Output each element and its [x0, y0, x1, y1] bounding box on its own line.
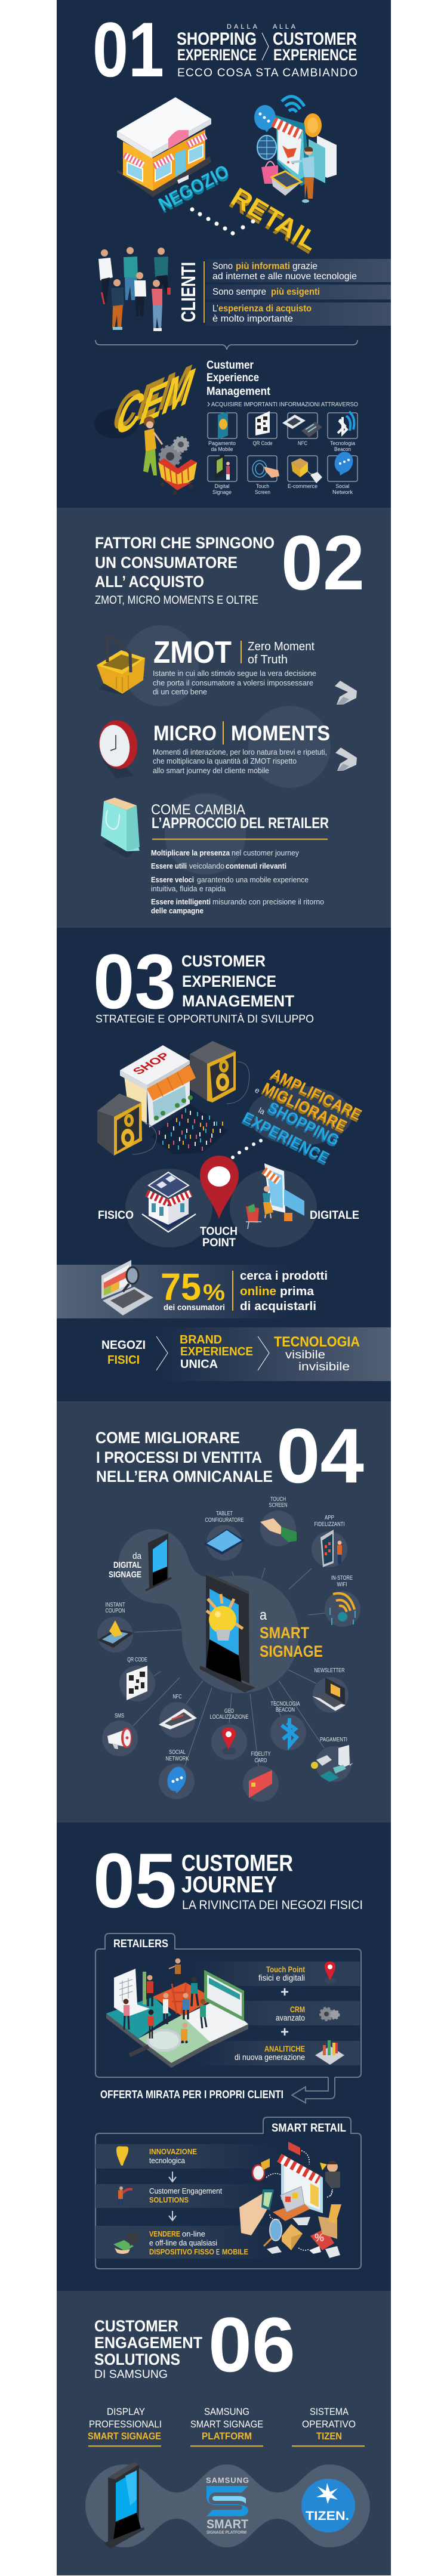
- heading: fattori: FATTORI CHE SPINGONO: [95, 534, 275, 552]
- heading: customer experience management: CUSTOMER: [181, 952, 266, 970]
- logo: tizen: TIZEN.: [306, 2509, 349, 2523]
- blob: three solutions: [85, 2464, 370, 2547]
- illustration: smart retail scene: %: [315, 2232, 324, 2244]
- subheading: LA RIVINCITA DEI NEGOZI FISICI: [182, 1898, 363, 1912]
- node: tecnologia beacon: BEACON: [276, 1707, 295, 1713]
- column: samsung smart signage platform: PLATFORM: [202, 2430, 252, 2442]
- stat: 75%: dei consumatori: [164, 1302, 225, 1312]
- text: cerca i prodotti: prima: [280, 1285, 315, 1298]
- row: più esigenti: [206, 285, 391, 299]
- callout: amplificare e migliorare: SHOPPING: [264, 1100, 341, 1151]
- callout: amplificare e migliorare: [239, 1064, 365, 1169]
- callout: amplificare e migliorare: SHOPPING: [265, 1098, 343, 1149]
- tile: tecnologia beacon: [328, 412, 357, 453]
- text: cerca i prodotti: cerca i prodotti: [240, 1270, 328, 1283]
- box: smart retail frame: [95, 2117, 361, 2269]
- illustration: smart retail scene: [239, 2142, 341, 2258]
- panel: section 05: [57, 1823, 391, 2291]
- plus: +: [280, 2024, 289, 2040]
- heading: customer journey: JOURNEY: [181, 1872, 277, 1898]
- plus: +: [280, 1984, 289, 2000]
- node: nfc: NFC: [173, 1694, 181, 1700]
- row: analitiche: di nuova generazione: [235, 2052, 305, 2062]
- row: più informati: grazie: [292, 261, 317, 271]
- text: tecnologia: [274, 1334, 360, 1373]
- stat: 75%: 75: [161, 1265, 201, 1308]
- arrow down: [169, 2211, 176, 2220]
- label: retail: RETAIL: [224, 186, 321, 260]
- node: geo localizzazione: [210, 1708, 249, 1760]
- heading: customer journey: CUSTOMER: [181, 1851, 293, 1876]
- illustration: shop with speakers and crowd: SHOP: [130, 1051, 173, 1077]
- text: micro moments description: [153, 748, 327, 775]
- logo: tizen: [301, 2479, 355, 2532]
- row: esperienza di acquisto: esperienza di acquisto: [218, 304, 312, 314]
- labels: fisico, touch point, digitale: [98, 1209, 359, 1249]
- heading: shopping to customer experience: EXPERIENCE: [177, 46, 257, 64]
- dotted connector: [231, 1139, 263, 1159]
- node: fidelity card: FIDELITY: [251, 1751, 271, 1758]
- panel: section 03: [57, 928, 391, 1401]
- text: tecnologia: TECNOLOGIA: [274, 1334, 360, 1350]
- column: display professionali: PROFESSIONALI: [89, 2419, 162, 2430]
- tile: social network: Network: [332, 489, 353, 496]
- list: retailer approach: intuitiva, fluida e rapida: [151, 885, 226, 893]
- text: negozi fisici: [101, 1339, 146, 1367]
- label: retail: RETAIL: [226, 183, 323, 257]
- subheading: ECCO COSA STA CAMBIANDO: [177, 67, 357, 79]
- brace: [95, 340, 357, 350]
- node: app fidelizzanti: APP: [325, 1515, 334, 1521]
- divider: clienti: [204, 261, 205, 323]
- label: zmot: [153, 635, 315, 670]
- column: sistema operativo tizen: SISTEMA: [310, 2406, 349, 2417]
- column: samsung smart signage platform: SAMSUNG: [204, 2406, 249, 2417]
- band: negozi fisici to tecnologia: [57, 1327, 391, 1381]
- node: social network: SOCIAL: [169, 1749, 186, 1756]
- tile: tecnologia beacon: Tecnologia: [330, 440, 356, 447]
- heading: fattori: [95, 534, 275, 591]
- heading: processi di vendita: NELL’ERA OMNICANALE: [96, 1468, 273, 1485]
- heading: customer experience management: Experience: [206, 372, 259, 384]
- list: retailer approach: nel customer journey: [232, 849, 300, 857]
- column: display professionali: [88, 2406, 162, 2447]
- list: retailer approach: contenuti rilevanti: [226, 862, 286, 870]
- heading: customer engagement solutions: ENGAGEMENT: [94, 2334, 202, 2352]
- callout: amplificare e migliorare: MIGLIORARE: [260, 1079, 350, 1135]
- icon: map pin: [200, 1156, 239, 1219]
- list: retailer approach: Essere veloci: [151, 876, 194, 884]
- text: brand experience unica: EXPERIENCE: [180, 1345, 253, 1358]
- list: retailer approach: Essere intelligenti: [151, 898, 211, 906]
- tile: tecnologia beacon: Beacon: [334, 446, 351, 453]
- text: brand experience unica: UNICA: [180, 1358, 218, 1371]
- column: display professionali: DISPLAY: [107, 2406, 145, 2417]
- callout: amplificare e migliorare: AMPLIFICARE: [268, 1064, 365, 1124]
- row: vendere: MOBILE: [222, 2247, 248, 2256]
- column: samsung smart signage platform: [190, 2406, 263, 2447]
- text: micro moments description: allo smart journey del cliente mobile: [153, 767, 269, 775]
- text: cerca i prodotti: [240, 1270, 328, 1313]
- node: instant coupon: [97, 1602, 134, 1653]
- row: più informati: Sono: [212, 261, 233, 271]
- logo: samsung smart signage platform: SAMSUNG: [206, 2476, 249, 2485]
- decorative circles: [122, 625, 331, 875]
- label: clienti: CLIENTI: [177, 262, 199, 322]
- stat: 75%: %: [203, 1280, 225, 1305]
- node: touch screen: SCREEN: [269, 1502, 288, 1509]
- stat: 75%: [161, 1265, 225, 1312]
- tile: touch screen: Screen: [255, 489, 270, 496]
- column: samsung smart signage platform: SMART SIGNAGE: [190, 2419, 263, 2430]
- column: sistema operativo tizen: OPERATIVO: [302, 2419, 356, 2430]
- number 04: 04: [276, 1412, 364, 1499]
- node: tablet configuratore: CONFIGURATORE: [205, 1517, 244, 1524]
- heading: shopping to customer experience: CUSTOMER: [273, 29, 357, 49]
- illustration: CEM letters and shopper: CEM: [109, 356, 202, 448]
- blob: digital signage to smart signage: [118, 1529, 299, 1693]
- text: brand experience unica: BRAND: [180, 1333, 222, 1346]
- list: retailer approach: Moltiplicare la presenza: [151, 849, 230, 857]
- touch point circles: [125, 1169, 317, 1247]
- heading: customer experience management: Management: [206, 385, 271, 398]
- subheading: STRATEGIE E OPPORTUNITÀ DI SVILUPPO: [95, 1013, 314, 1025]
- label: da digital signage: [109, 1551, 142, 1580]
- text: cerca i prodotti: di acquistarli: [240, 1300, 316, 1313]
- tile: e-commerce: [288, 456, 322, 490]
- label: a smart signage: a: [260, 1607, 267, 1623]
- heading: customer engagement solutions: SOLUTIONS: [94, 2350, 180, 2368]
- number 05: 05: [93, 1837, 177, 1924]
- number 02: 02: [281, 519, 365, 606]
- panel: section 06: [0, 2291, 447, 2576]
- row: customer engagement solutions: Customer Engagement: [149, 2186, 222, 2195]
- logo: samsung smart signage platform: SMART: [206, 2518, 248, 2531]
- number 03: 03: [93, 938, 176, 1025]
- node: instant coupon: COUPON: [105, 1608, 125, 1614]
- node: newsletter: [312, 1667, 349, 1713]
- heading: come cambia: L’APPROCCIO DEL RETAILER: [152, 815, 329, 832]
- tile: qr code: [248, 411, 277, 447]
- label: da digital signage: SIGNAGE: [109, 1570, 141, 1580]
- tile: digital signage: [208, 453, 237, 496]
- row: touch point: Touch Point: [266, 1965, 305, 1974]
- node: nfc: [159, 1694, 197, 1738]
- row: più informati: ad internet e alle nuove tecnologie: [212, 271, 357, 282]
- tile: digital signage: Signage: [212, 489, 232, 496]
- icon: clock: [96, 718, 140, 779]
- heading: customer engagement solutions: DI SAMSUNG: [94, 2368, 168, 2381]
- node: tecnologia beacon: [270, 1701, 306, 1750]
- number 01: 01: [93, 6, 164, 93]
- label: a smart signage: SIGNAGE: [260, 1642, 323, 1660]
- list: retailer approach: misurando con precisione il ritorno: [212, 898, 324, 906]
- row: innovazione: [95, 2144, 280, 2169]
- icon: shopping bag: [101, 798, 140, 858]
- panel: section 02: [57, 508, 391, 928]
- illustration: store: [117, 97, 211, 197]
- tile: touch screen: Touch: [256, 483, 269, 490]
- row: analitiche: [191, 2040, 360, 2065]
- heading: customer engagement solutions: CUSTOMER: [94, 2317, 178, 2335]
- node: app fidelizzanti: [312, 1515, 347, 1567]
- callout: amplificare e migliorare: EXPERIENCE: [239, 1110, 331, 1169]
- tile: nfc: NFC: [298, 440, 307, 447]
- heading: processi di vendita: I PROCESSI DI VENTITA: [96, 1448, 262, 1466]
- heading: customer journey: [181, 1851, 293, 1898]
- heading: shopping to customer experience: DALLA: [227, 23, 258, 30]
- icon: basket: [97, 637, 145, 695]
- row: touch point: [191, 1962, 360, 1986]
- tile: social network: [328, 449, 357, 496]
- illustration: CEM letters and shopper: [94, 352, 202, 495]
- heading: shopping to customer experience: SHOPPING: [177, 29, 257, 49]
- label: negozio: NEGOZIO: [155, 160, 232, 215]
- tile: touch screen: [248, 456, 279, 496]
- node: tablet configuratore: TABLET: [216, 1511, 233, 1517]
- node: sms: SMS: [115, 1713, 124, 1719]
- labels: fisico, touch point, digitale: TOUCH: [200, 1225, 238, 1238]
- text: zmot description: che porta il consumatore a volersi impossessare: [153, 679, 313, 687]
- panel: section 04: [57, 1401, 391, 1823]
- node: tablet configuratore: [204, 1511, 245, 1561]
- node: pagamenti: PAGAMENTI: [320, 1737, 347, 1743]
- node: social network: NETWORK: [166, 1756, 189, 1762]
- subheading: ZMOT, MICRO MOMENTS E OLTRE: [95, 594, 258, 607]
- column: sistema operativo tizen: TIZEN: [316, 2430, 342, 2442]
- row: vendere: DISPOSITIVO FISSO: [149, 2247, 214, 2256]
- tile: qr code: QR Code: [253, 440, 272, 447]
- logo: samsung smart signage platform: SIGNAGE PLATFORM: [206, 2531, 246, 2535]
- arrow chevron: [258, 1336, 269, 1370]
- node: touch screen: [260, 1496, 297, 1546]
- arrow: offerta mirata: [292, 2077, 335, 2103]
- text: micro moments description: che moltiplicano la quantità di ZMOT rispetto: [153, 757, 297, 765]
- label: micro moments: MOMENTS: [231, 722, 330, 745]
- heading: customer experience management: [206, 359, 271, 398]
- heading: come cambia: COME CAMBIA: [151, 802, 245, 818]
- node: newsletter: NEWSLETTER: [314, 1667, 345, 1674]
- icon: physical shop: [142, 1172, 196, 1232]
- row: vendere: e off-line da qualsiasi: [149, 2238, 217, 2247]
- heading: processi di vendita: COME MIGLIORARE: [95, 1429, 240, 1447]
- heading: shopping to customer experience: ALLA: [273, 23, 296, 30]
- row: analitiche: ANALITICHE: [264, 2044, 305, 2053]
- callout: amplificare e migliorare: e: [254, 1085, 261, 1095]
- label: retailers: RETAILERS: [113, 1938, 168, 1950]
- icon: signage kiosk: [103, 2462, 144, 2549]
- row: vendere: VENDERE: [149, 2229, 180, 2238]
- text: micro moments description: Momenti di interazione, per loro natura brevi e ripetuti,: [153, 748, 327, 756]
- box: retailers frame: [95, 1933, 361, 2077]
- row: più informati: più informati: [236, 261, 290, 271]
- text: cerca i prodotti: online: [240, 1285, 276, 1298]
- heading: customer experience management: MANAGEMENT: [182, 992, 294, 1010]
- divider: [232, 1271, 233, 1311]
- number 06: 06: [208, 2301, 295, 2388]
- divider: retailer: [152, 839, 328, 840]
- heading: fattori: UN CONSUMATORE: [95, 554, 238, 572]
- tile: e-commerce: E-commerce: [288, 483, 317, 490]
- tile: pagamento da mobile: da Mobile: [211, 446, 233, 453]
- icon: laptop with magnifier: [101, 1260, 153, 1315]
- text: brand experience unica: [180, 1333, 253, 1371]
- heading: fattori: ALL’ ACQUISTO: [95, 573, 204, 591]
- label: negozio: NEGOZIO: [156, 163, 233, 217]
- row: innovazione: tecnologica: [149, 2156, 186, 2165]
- row: più esigenti: più esigenti: [271, 287, 320, 297]
- illustration: team on puzzle: [106, 1958, 248, 2068]
- node: tecnologia beacon: TECNOLOGIA: [271, 1701, 300, 1707]
- tile: nfc: [282, 413, 322, 447]
- row: innovazione: INNOVAZIONE: [149, 2147, 197, 2156]
- arrow chevron: [156, 1336, 168, 1370]
- tile: digital signage: Digital: [215, 483, 229, 490]
- row: esperienza di acquisto: [206, 302, 391, 326]
- label: smart retail: SMART RETAIL: [272, 2122, 346, 2135]
- node: in-store wifi: IN-STORE: [331, 1575, 353, 1582]
- row: crm: avanzato: [276, 2013, 305, 2022]
- list: retailer approach: Essere utili: [151, 862, 187, 870]
- row: più esigenti: Sono sempre: [212, 287, 266, 297]
- callout: amplificare e migliorare: MIGLIORARE: [258, 1080, 349, 1136]
- row: vendere: [95, 2226, 280, 2259]
- row: esperienza di acquisto: L’: [212, 304, 218, 314]
- column: sistema operativo tizen: [292, 2406, 365, 2447]
- label: offerta mirata: OFFERTA MIRATA PER I PROPRI CLIENTI: [100, 2089, 283, 2101]
- node: geo localizzazione: GEO: [224, 1708, 234, 1715]
- logo: samsung smart signage platform: [206, 2476, 249, 2535]
- illustration: shop with speakers and crowd: [97, 1041, 249, 1156]
- node: app fidelizzanti: FIDELIZZANTI: [314, 1521, 345, 1528]
- connector lines: [133, 1568, 325, 1766]
- row: crm: [191, 2001, 360, 2025]
- row: vendere: on-line: [182, 2229, 205, 2238]
- caption: acquisire informazioni: ACQUISIRE IMPORTANTI INFORMAZIONI ATTRAVERSO: [211, 401, 358, 408]
- text: negozi fisici: NEGOZI: [101, 1339, 146, 1352]
- column: display professionali: SMART SIGNAGE: [88, 2430, 161, 2442]
- heading: customer experience management: [181, 952, 294, 1010]
- heading: shopping to customer experience: [177, 23, 357, 64]
- label: zmot: ZMOT: [153, 635, 232, 670]
- dotted connector: [190, 208, 255, 235]
- labels: fisico, touch point, digitale: DIGITALE: [310, 1209, 359, 1222]
- arrow: [335, 748, 357, 771]
- list: retailer approach: garantendo una mobile experience: [197, 876, 309, 884]
- node: instant coupon: INSTANT: [105, 1602, 125, 1608]
- row: customer engagement solutions: SOLUTIONS: [149, 2195, 189, 2204]
- arrow down: [169, 2172, 176, 2182]
- label: da digital signage: da: [132, 1551, 142, 1561]
- text: zmot description: di un certo bene: [153, 688, 207, 696]
- row: touch point: fisici e digitali: [258, 1973, 305, 1982]
- text: zmot description: [153, 669, 316, 696]
- list: retailer approach: veicolando: [189, 862, 224, 870]
- row: customer engagement solutions: [95, 2184, 280, 2208]
- node: touch screen: TOUCH: [270, 1496, 286, 1503]
- illustration: CEM letters and shopper: CEM: [106, 352, 198, 444]
- icon: digital shopper: [246, 1163, 304, 1229]
- node: in-store wifi: [325, 1575, 360, 1627]
- row: crm: CRM: [290, 2004, 305, 2014]
- labels: fisico, touch point, digitale: FISICO: [98, 1209, 134, 1222]
- heading: shopping to customer experience: EXPERIENCE: [273, 46, 357, 64]
- heading: come cambia: [151, 802, 329, 832]
- callout: amplificare e migliorare: la: [257, 1105, 267, 1117]
- node: in-store wifi: WIFI: [337, 1582, 347, 1588]
- callout: amplificare e migliorare: AMPLIFICARE: [267, 1066, 363, 1126]
- tile: pagamento da mobile: Pagamento: [208, 440, 236, 447]
- label: micro moments: MICRO: [153, 722, 217, 745]
- icon: large smart signage: [200, 1573, 255, 1692]
- label: zmot: Zero Moment: [248, 640, 315, 653]
- node: geo localizzazione: LOCALIZZAZIONE: [210, 1714, 249, 1721]
- node: qr code: [119, 1657, 155, 1701]
- text: negozi fisici: FISICI: [107, 1354, 140, 1367]
- heading: processi di vendita: [95, 1429, 273, 1485]
- node: pagamenti: [311, 1737, 353, 1782]
- heading: customer engagement solutions: [94, 2317, 202, 2381]
- list: retailer approach: delle campagne: [151, 907, 204, 915]
- band: 75 percent: [57, 1260, 391, 1318]
- row: esperienza di acquisto: è molto importante: [212, 314, 293, 324]
- callout: amplificare e migliorare: EXPERIENCE: [240, 1108, 332, 1167]
- node: sms: [102, 1713, 138, 1756]
- row: vendere: E: [216, 2247, 220, 2256]
- arrow: [335, 681, 357, 705]
- label: da digital signage: DIGITAL: [113, 1560, 141, 1570]
- label: micro moments: [153, 721, 330, 745]
- list: retailer approach: [151, 849, 324, 915]
- illustration: digital retail: [254, 97, 337, 203]
- row: più informati: [206, 259, 391, 282]
- text: tecnologia: visibile: [285, 1349, 325, 1361]
- node: fidelity card: [243, 1751, 279, 1802]
- label: zmot: of Truth: [248, 653, 288, 666]
- labels: fisico, touch point, digitale: POINT: [202, 1237, 236, 1249]
- label: a smart signage: SMART: [260, 1624, 309, 1642]
- node: qr code: QR CODE: [127, 1657, 147, 1663]
- icon: small digital signage: [146, 1533, 171, 1590]
- tile: pagamento da mobile: [208, 412, 237, 453]
- text: zmot description: Istante in cui allo stimolo segue la vera decisione: [153, 669, 316, 678]
- label: a smart signage: [260, 1607, 323, 1660]
- heading: customer experience management: EXPERIENCE: [182, 972, 276, 990]
- tile: social network: Social: [335, 483, 350, 490]
- heading: customer experience management: Custumer: [206, 359, 254, 372]
- node: social network: [159, 1749, 195, 1799]
- panel: section 01: [57, 0, 391, 508]
- text: tecnologia: invisibile: [298, 1361, 350, 1373]
- illustration: customers group: [98, 247, 171, 331]
- node: fidelity card: CARD: [254, 1758, 267, 1764]
